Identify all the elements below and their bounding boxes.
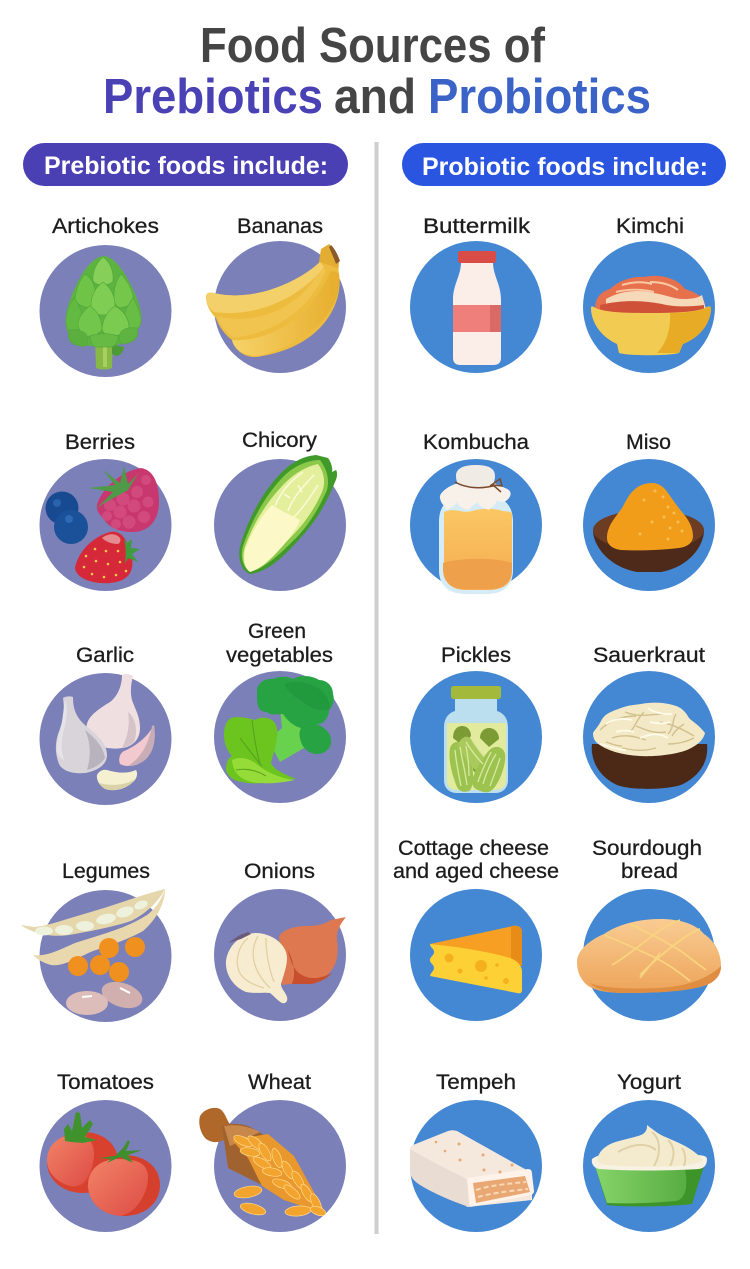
icon: miso bowl [593, 483, 704, 572]
item: green vegetables [214, 619, 346, 803]
item: garlic: Garlic [76, 643, 134, 667]
icon: milk bottle [453, 251, 501, 365]
title: and [334, 70, 416, 124]
item: yogurt [583, 1070, 715, 1232]
item: legumes: Legumes [62, 859, 150, 883]
item: wheat: Wheat [248, 1070, 311, 1094]
item: bananas [206, 214, 346, 373]
item: wheat [199, 1070, 346, 1232]
item: chicory [214, 428, 346, 591]
icon: artichoke [66, 256, 141, 370]
heading: prebiotic foods pill: Prebiotic foods include: [44, 152, 328, 180]
icon: sourdough loaf [577, 919, 721, 993]
item: buttermilk: Buttermilk [423, 214, 530, 238]
icon: garlic bulbs [56, 674, 155, 790]
item: berries [40, 430, 172, 591]
item: garlic [40, 643, 172, 805]
item: green vegetables: vegetables [226, 643, 333, 667]
item: onions [214, 859, 346, 1021]
title [103, 19, 651, 124]
icon: pickle jar [444, 686, 508, 793]
item: sourdough bread [577, 836, 721, 1021]
item: pickles [410, 643, 542, 803]
item: green vegetables: Green [248, 619, 306, 643]
item: kimchi: Kimchi [616, 214, 684, 238]
item: yogurt: Yogurt [617, 1070, 681, 1094]
icon: kombucha jar [439, 465, 513, 594]
icon: mixed berries [46, 466, 159, 583]
icon: yogurt cup [592, 1125, 707, 1206]
item: kimchi [583, 214, 715, 373]
item: artichokes [40, 214, 172, 377]
item: pickles: Pickles [441, 643, 511, 667]
icon: tomatoes [47, 1112, 160, 1216]
icon: chicory [239, 455, 337, 574]
item: bananas: Bananas [237, 214, 323, 238]
icon: wheat scoop [199, 1108, 327, 1217]
icon: cheese wedge [430, 926, 522, 993]
title: Probiotics [428, 70, 651, 124]
item: sauerkraut [583, 643, 715, 803]
item: sauerkraut: Sauerkraut [593, 643, 705, 667]
item: miso: Miso [626, 430, 671, 454]
heading: prebiotic foods pill [23, 143, 348, 186]
item: tempeh [410, 1070, 542, 1232]
icon: legumes [21, 889, 165, 1015]
icon: tempeh bar [410, 1130, 534, 1207]
heading: probiotic foods pill [402, 143, 726, 186]
item: tomatoes [40, 1070, 172, 1232]
item: buttermilk [410, 214, 542, 373]
item: tempeh: Tempeh [436, 1070, 516, 1094]
item: berries: Berries [65, 430, 135, 454]
item: cottage cheese and aged cheese [393, 836, 559, 1021]
icon: broccoli and leafy greens [224, 676, 334, 783]
item: artichokes: Artichokes [52, 214, 159, 238]
heading: probiotic foods pill: Probiotic foods include: [422, 153, 708, 181]
item: onions: Onions [244, 859, 315, 883]
item: cottage cheese and aged cheese: and aged cheese [393, 859, 559, 883]
icon: onions [226, 917, 346, 1003]
item: miso [583, 430, 715, 591]
icon: bananas [206, 244, 340, 357]
item: tomatoes: Tomatoes [57, 1070, 154, 1094]
item: cottage cheese and aged cheese: Cottage cheese [398, 836, 549, 860]
icon: kimchi bowl [591, 276, 711, 355]
title: Prebiotics [103, 70, 323, 124]
item: legumes [21, 859, 172, 1022]
title: Food Sources of [200, 19, 546, 73]
item: chicory: Chicory [242, 428, 317, 452]
item: kombucha [410, 430, 542, 594]
item: sourdough bread: bread [621, 859, 678, 883]
item: kombucha: Kombucha [423, 430, 529, 454]
icon: sauerkraut bowl [592, 703, 707, 789]
item: sourdough bread: Sourdough [592, 836, 702, 860]
